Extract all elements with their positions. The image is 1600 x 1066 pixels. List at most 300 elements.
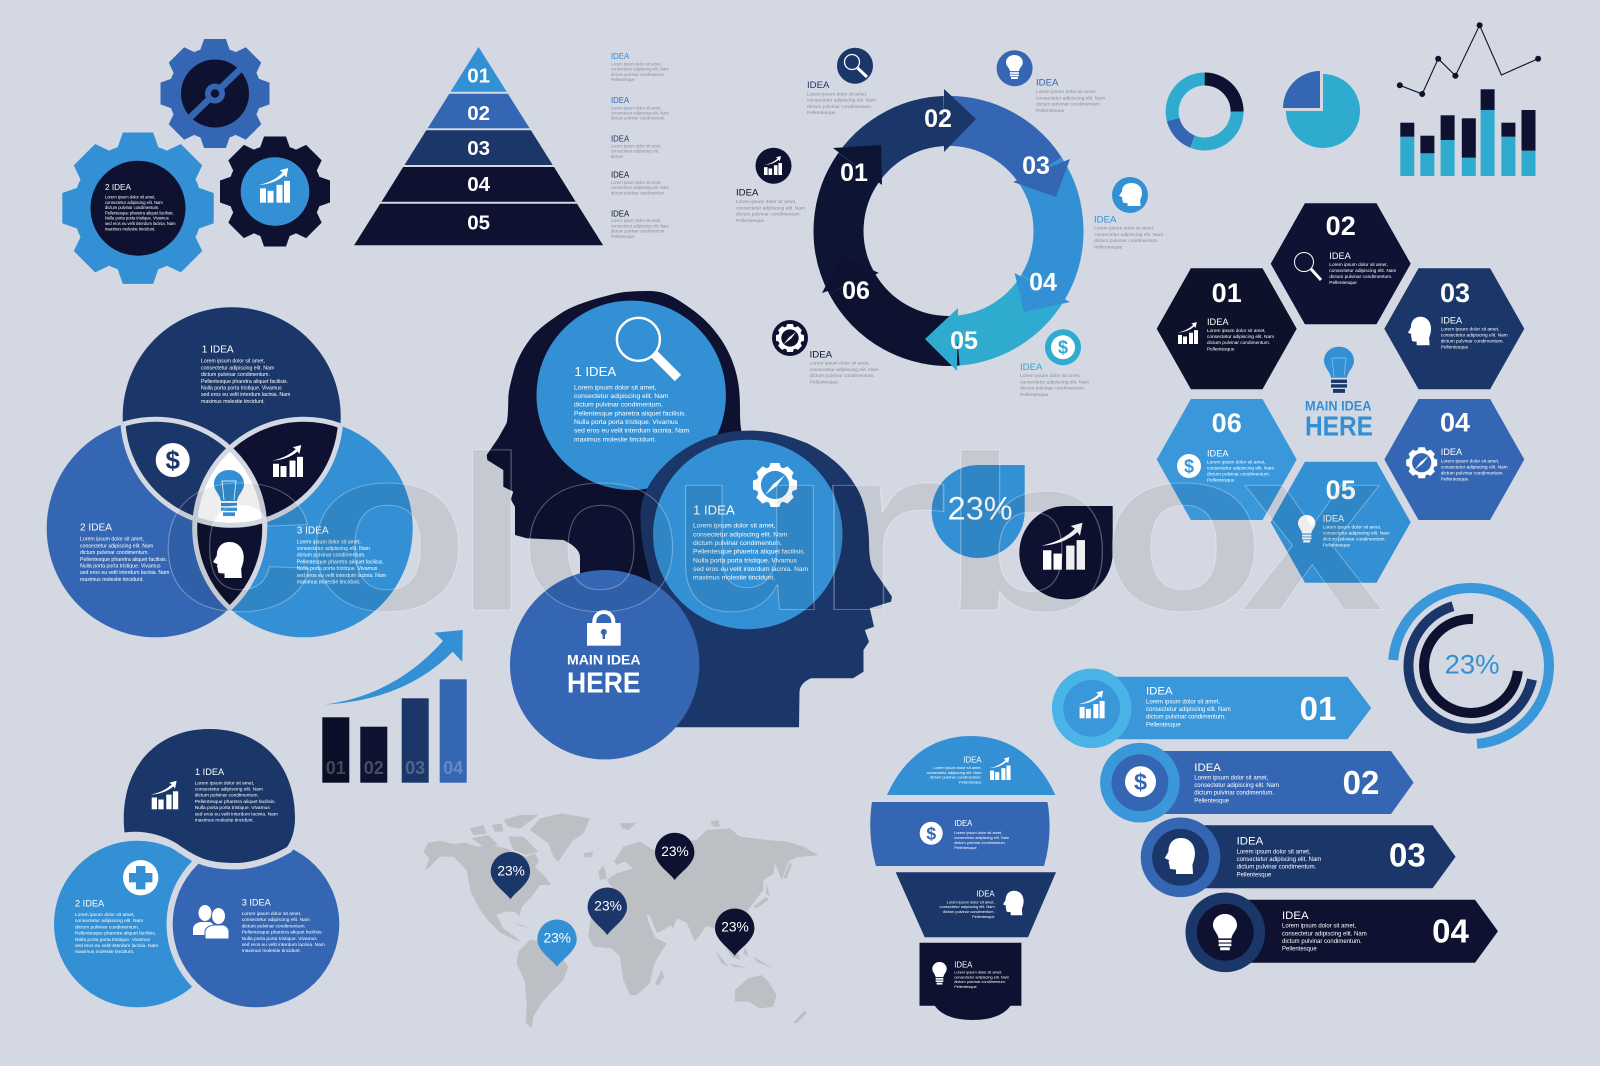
trefoil text 3: consectetur adipiscing elit. Nam	[242, 917, 310, 923]
map pin: africa	[588, 888, 627, 935]
gear: left with text	[62, 132, 214, 284]
circle: idea 1 upper: 1 IDEA	[574, 364, 616, 379]
ring label: dollar: dictum pulvinar condimentum.	[1020, 386, 1085, 392]
hexagon 01: Lorem ipsum dolor sit amet,	[1207, 328, 1266, 334]
circle: idea 1 lower: Nulla porta porta tristique. Vivamus	[693, 557, 798, 564]
trefoil text 2: Nulla porta porta tristique. Vivamus	[75, 937, 151, 943]
banner 02: dictum pulvinar condimentum.	[1194, 791, 1274, 797]
main idea heading	[1305, 398, 1373, 442]
venn text 2	[80, 523, 169, 583]
banner 02: 02	[1343, 764, 1379, 801]
bulb segment 2: dictum pulvinar condimentum.	[954, 840, 1006, 845]
trefoil text 2: sed eros eu velit interdum lacinia. Nam	[75, 943, 158, 949]
hexagon 06: 06	[1212, 408, 1242, 438]
ring label: bulb	[1036, 78, 1105, 114]
banner 04: dictum pulvinar condimentum.	[1282, 939, 1362, 945]
venn circles	[47, 307, 413, 637]
ring label: chart	[736, 188, 805, 224]
gauge: 23% concentric rings: 23%	[1445, 649, 1500, 679]
trefoil text 1: maximus molestie tincidunt.	[195, 818, 254, 824]
bulb segment 1: IDEA	[963, 755, 982, 764]
venn text 2: Lorem ipsum dolor sit amet,	[80, 537, 144, 543]
hexagon 02: 02	[1326, 211, 1356, 241]
map pin: russia	[655, 833, 694, 880]
trefoil text 1	[195, 767, 278, 824]
venn text 1: maximus molestie tincidunt.	[201, 399, 265, 405]
panel: gears	[62, 39, 330, 284]
pyramid level 02	[428, 94, 530, 128]
venn text 1: dictum pulvinar condimentum.	[201, 372, 270, 378]
circle: main idea: HERE	[567, 667, 641, 699]
map pin: north america: 23%	[497, 863, 525, 879]
banner 04: consectetur adipiscing elit. Nam	[1282, 931, 1367, 937]
banner 03: dictum pulvinar condimentum.	[1237, 865, 1317, 871]
trefoil text 3: Nulla porta porta tristique. Vivamus	[242, 936, 317, 942]
icon: head	[213, 542, 244, 578]
circle: idea 1 lower: maximus molestie tincidunt.	[693, 575, 775, 582]
venn text 1: Nulla porta porta tristique. Vivamus	[201, 386, 282, 392]
hexagon 06: Lorem ipsum dolor sit amet,	[1207, 459, 1266, 465]
ring bodies	[839, 121, 1059, 341]
panel: trefoil three ideas	[54, 729, 346, 1014]
venn text 2: Pellentesque pharetra aliquet facilisis.	[80, 557, 167, 563]
map pin: africa: 23%	[594, 898, 622, 914]
venn text 3: 3 IDEA	[297, 525, 329, 536]
trefoil text 2: Lorem ipsum dolor sit amet,	[75, 912, 135, 918]
watermark: u	[669, 396, 832, 660]
bulb segment 2: $	[926, 824, 936, 844]
watermark: o	[306, 396, 469, 660]
icon: chart	[272, 445, 303, 477]
pyramid level 01: 01	[467, 65, 490, 88]
bar labels: 02	[364, 758, 384, 778]
icon: dollar: $	[165, 445, 180, 475]
gear: right with chart icon	[220, 136, 330, 246]
trefoil text 3: sed eros eu velit interdum lacinia. Nam	[242, 942, 325, 948]
ring label: dollar: Lorem ipsum dolor sit amet,	[1020, 373, 1080, 379]
bulb segment 4	[920, 943, 1021, 1020]
pyramid level 03: 03	[467, 137, 490, 160]
hexagon 03: Lorem ipsum dolor sit amet,	[1441, 326, 1499, 332]
ring numbers: 05	[950, 327, 978, 355]
hexagon 04: Pellentesque	[1441, 476, 1469, 482]
arrow: rising	[325, 630, 463, 704]
hexagon 03	[1384, 268, 1524, 389]
watermark: x	[1241, 396, 1384, 660]
pyramid labels: Pellentesque	[611, 77, 635, 82]
gear: left with text: Lorem ipsum dolor sit amet,	[105, 194, 156, 200]
ring label: compass gear	[810, 349, 879, 385]
banner 02: IDEA	[1194, 762, 1221, 774]
hexagon 01: dictum pulvinar condimentum.	[1207, 340, 1270, 346]
pyramid labels: Lorem ipsum dolor sit amet,	[611, 105, 662, 110]
hexagon 04: Lorem ipsum dolor sit amet,	[1441, 458, 1499, 464]
banner 04: 04	[1432, 912, 1469, 949]
banner 01: consectetur adipiscing elit. Nam	[1146, 707, 1231, 713]
gear: left with text: dictum pulvinar condimentum.	[105, 205, 159, 210]
hexagon 01: 01	[1212, 278, 1242, 308]
bulb segment 3	[896, 872, 1056, 937]
banner 01: Lorem ipsum dolor sit amet,	[1146, 699, 1220, 705]
trefoil text 3: 3 IDEA	[242, 898, 272, 908]
trefoil text 2: Pellentesque pharetra aliquet facilisis.	[75, 931, 156, 937]
head silhouette: navy	[640, 431, 892, 727]
panel: light bulb segments	[870, 736, 1056, 1020]
pyramid labels: Lorem ipsum dolor sit amet,	[611, 62, 662, 66]
banner 02: $	[1134, 769, 1147, 795]
circle: idea 1 lower: sed eros eu velit interdum lacinia. Nam	[693, 566, 809, 573]
banner 04: Lorem ipsum dolor sit amet,	[1282, 924, 1356, 930]
trefoil text 1: 1 IDEA	[195, 767, 225, 777]
ring label: head: Lorem ipsum dolor sit amet,	[1094, 226, 1154, 232]
ring label: chart: Pellentesque	[736, 218, 765, 224]
bar labels: 01	[326, 758, 346, 778]
icon: dollar badge	[1045, 329, 1081, 365]
hexagon 03: IDEA	[1441, 315, 1463, 325]
bulb segment 2: IDEA	[954, 819, 973, 828]
watermark: b	[941, 410, 1114, 657]
venn text 2: maximus molestie tincidunt.	[80, 577, 144, 583]
gear: left with text: maximus molestie tincidunt.	[105, 226, 155, 231]
hexagon 06: $	[1184, 456, 1194, 476]
banner 01: 01	[1300, 690, 1336, 727]
trefoil text 3: Pellentesque pharetra aliquet facilisis.	[242, 930, 323, 936]
hexagon 01	[1157, 268, 1297, 389]
hexagon 02: IDEA	[1329, 251, 1352, 261]
trefoil text 2: consectetur adipiscing elit. Nam	[75, 918, 143, 924]
bar labels	[326, 758, 463, 778]
venn text 1	[201, 345, 290, 405]
trefoil text 2: dictum pulvinar condimentum.	[75, 924, 139, 930]
circle: idea 1 upper: Lorem ipsum dolor sit amet,	[574, 384, 657, 391]
banner 01: IDEA	[1146, 685, 1173, 697]
pie chart	[1283, 71, 1360, 148]
bulb segment 1: dictum pulvinar condimentum.	[930, 775, 982, 780]
ring label: dollar: Pellentesque	[1020, 392, 1049, 398]
ring label: magnifier: Pellentesque	[807, 110, 836, 116]
pyramid level 04	[382, 167, 576, 202]
petal 3	[173, 841, 339, 1007]
venn text 2: Nulla porta porta tristique. Vivamus	[80, 564, 161, 570]
venn intersections	[120, 416, 343, 610]
circle: idea 1 lower	[653, 440, 842, 629]
gear: left with text: Nulla porta porta tristique. Vivamus	[105, 216, 169, 221]
gear: left with text: 2 IDEA	[105, 183, 131, 192]
ring label: chart: consectetur adipiscing elit. Nam	[736, 205, 805, 211]
gear: top compass	[160, 39, 270, 148]
banner 03: IDEA	[1237, 836, 1264, 848]
hexagon 06: IDEA	[1207, 449, 1229, 459]
bulb segment 2: consectetur adipiscing elit. Nam	[954, 835, 1009, 840]
circle: idea 1 upper: Pellentesque pharetra aliquet facilisis.	[574, 410, 686, 417]
venn text 3: Lorem ipsum dolor sit amet,	[297, 539, 361, 545]
head silhouette: dark	[487, 291, 745, 600]
hexagon 02	[1271, 203, 1411, 324]
bulb segment 4: IDEA	[954, 960, 973, 969]
banner 04: IDEA	[1282, 910, 1309, 922]
hexagon 04	[1384, 399, 1524, 520]
bar chart with rising arrow	[322, 630, 467, 783]
banner 01: Pellentesque	[1146, 722, 1181, 728]
ring label: magnifier: Lorem ipsum dolor sit amet,	[807, 92, 867, 98]
ring label: compass gear: Pellentesque	[810, 379, 838, 385]
ring label: bulb: consectetur adipiscing elit. Nam	[1036, 95, 1105, 101]
hexagon 02: dictum pulvinar condimentum.	[1329, 274, 1392, 280]
ring label: compass gear: dictum pulvinar condimentum.	[810, 373, 875, 379]
circle: idea 1 lower: 1 IDEA	[693, 502, 735, 517]
map pin: russia: 23%	[661, 843, 689, 859]
venn text 1: Lorem ipsum dolor sit amet,	[201, 359, 265, 365]
ring label: compass gear: consectetur adipiscing elit. Nam	[810, 367, 879, 373]
bulb segment 3: dictum pulvinar condimentum.	[943, 909, 995, 914]
trefoil text 3	[242, 898, 325, 954]
icon: chart badge	[756, 148, 792, 184]
hexagon 05: Pellentesque	[1323, 542, 1351, 548]
pyramid labels: dictum pulvinar condimentum.	[611, 72, 665, 77]
bulb segment 4: consectetur adipiscing elit. Nam	[954, 974, 1009, 979]
banner 04: Pellentesque	[1282, 947, 1317, 953]
circle: idea 1 lower: consectetur adipiscing elit. Nam	[693, 531, 788, 538]
pyramid level 02: 02	[467, 102, 490, 125]
ring label: chart: Lorem ipsum dolor sit amet,	[736, 199, 796, 205]
circle: main idea	[510, 570, 699, 759]
banner 01: dictum pulvinar condimentum.	[1146, 715, 1226, 721]
gauge: 23% concentric rings	[1393, 588, 1549, 744]
venn text 3: Pellentesque pharetra aliquet facilisis.	[297, 559, 384, 565]
hexagon 05	[1271, 462, 1411, 583]
circle: idea 1 upper: consectetur adipiscing elit. Nam	[574, 393, 669, 400]
venn text 3: sed eros eu velit interdum lacinia. Nam	[297, 573, 386, 579]
trefoil text 1: Lorem ipsum dolor sit amet,	[195, 780, 254, 786]
hexagon 04: dictum pulvinar condimentum.	[1441, 470, 1504, 476]
hexagon 01: consectetur adipiscing elit. Nam	[1207, 334, 1274, 340]
venn text 2: consectetur adipiscing elit. Nam	[80, 543, 153, 549]
hexagon 04: 04	[1440, 408, 1470, 438]
banner 03: Lorem ipsum dolor sit amet,	[1237, 849, 1311, 855]
trefoil text 1: Pellentesque pharetra aliquet facilisis.	[195, 799, 276, 805]
bulb segment 4: Pellentesque	[954, 984, 977, 989]
gear: left with text: consectetur adipiscing elit. Nam	[105, 200, 163, 205]
banner 03	[1141, 818, 1456, 897]
icon: compass gear badge	[772, 320, 808, 356]
trefoil text 2: maximus molestie tincidunt.	[75, 949, 134, 955]
bar labels: 03	[405, 758, 425, 778]
banner 03: Pellentesque	[1237, 872, 1272, 878]
circle: idea 1 lower: Lorem ipsum dolor sit amet,	[693, 523, 776, 530]
pyramid labels: Lorem ipsum dolor sit amet,	[611, 144, 662, 149]
venn text 1: consectetur adipiscing elit. Nam	[201, 365, 274, 371]
icon: magnifier badge	[837, 48, 873, 84]
bulb segment 1	[887, 736, 1055, 795]
panel: overlapping heads	[487, 291, 892, 759]
bulb segment 1: consectetur adipiscing elit. Nam	[927, 770, 982, 775]
bulb segment 1: Lorem ipsum dolor sit amet,	[933, 765, 982, 770]
circle: idea 1 lower: Pellentesque pharetra aliquet facilisis.	[693, 549, 805, 556]
bulb segment 4: Lorem ipsum dolor sit amet,	[954, 970, 1002, 974]
pyramid level 05	[354, 204, 603, 245]
trefoil text 1: sed eros eu velit interdum lacinia. Nam	[195, 811, 278, 817]
ring label: compass gear: IDEA	[810, 349, 833, 360]
ring arrow heads	[822, 89, 1070, 371]
hexagon 03: Pellentesque	[1441, 344, 1469, 350]
bulb segment 3: IDEA	[976, 890, 995, 899]
bars	[322, 679, 467, 783]
pyramid labels: IDEA	[611, 96, 630, 105]
line chart	[1397, 22, 1541, 97]
banner 02: Lorem ipsum dolor sit amet,	[1194, 775, 1269, 781]
petal 2	[54, 834, 346, 1014]
map pin: asia	[715, 908, 754, 956]
ring label: chart: dictum pulvinar condimentum.	[736, 212, 801, 218]
bar labels: 04	[443, 758, 463, 778]
icon: bulb	[214, 470, 244, 516]
hexagon 02: Lorem ipsum dolor sit amet,	[1329, 262, 1388, 268]
circle: idea 1 upper: Nulla porta porta tristique. Vivamus	[574, 419, 679, 426]
watermark: o	[519, 396, 683, 660]
pyramid level 01	[450, 47, 507, 92]
ring label: dollar: consectetur adipiscing elit. Nam	[1020, 379, 1089, 385]
pyramid labels: consectetur adipiscing elit. Nam	[611, 185, 669, 190]
map continents	[423, 813, 818, 1028]
hexagon 04: consectetur adipiscing elit. Nam	[1441, 464, 1508, 470]
icon: dollar badge: $	[1058, 338, 1068, 358]
ring numbers: 03	[1022, 152, 1050, 180]
ring label: compass gear: Lorem ipsum dolor sit amet,	[810, 360, 870, 366]
ring numbers	[840, 105, 1057, 355]
map pin: asia: 23%	[721, 919, 749, 935]
pyramid labels: Lorem ipsum dolor sit amet,	[611, 218, 662, 223]
panel: pyramid	[354, 47, 669, 245]
pyramid level 03	[404, 130, 553, 165]
trefoil text 3: maximus molestie tincidunt.	[242, 948, 301, 954]
venn text 3	[297, 525, 386, 586]
gear: left with text: sed eros eu velit interdum lacinia. Nam	[105, 221, 176, 226]
ring label: magnifier: consectetur adipiscing elit. Nam	[807, 98, 876, 104]
venn text 3: Nulla porta porta tristique. Vivamus	[297, 566, 378, 572]
callout: 23% blue drop	[932, 465, 1025, 558]
icon: head badge	[1112, 177, 1148, 213]
donut chart	[1172, 79, 1237, 144]
venn text 3: dictum pulvinar condimentum.	[297, 553, 366, 559]
venn text 3: maximus molestie tincidunt.	[297, 580, 360, 586]
bulb segment 1: Pellentesque	[959, 780, 982, 784]
watermark	[157, 396, 1384, 660]
ring numbers: 04	[1029, 269, 1057, 297]
icon: dollar	[156, 443, 190, 477]
ring label: bulb: dictum pulvinar condimentum.	[1036, 102, 1101, 108]
callout: chart dark drop	[1019, 506, 1113, 599]
icon: centre bulb	[1324, 347, 1354, 393]
ring numbers: 06	[842, 277, 870, 305]
ring numbers: 02	[924, 105, 952, 133]
callout: 23% blue drop: 23%	[948, 490, 1013, 526]
ring label: head: IDEA	[1094, 215, 1117, 226]
pyramid level 05: 05	[467, 212, 490, 235]
hexagon 02: Pellentesque	[1329, 280, 1357, 286]
ring label: magnifier: IDEA	[807, 80, 830, 91]
pyramid labels: dictum pulvinar condimentum.	[611, 116, 665, 121]
ring label: dollar	[1020, 362, 1089, 398]
venn text 2: dictum pulvinar condimentum.	[80, 550, 149, 556]
ring label: chart: IDEA	[736, 188, 759, 199]
venn text 3: consectetur adipiscing elit. Nam	[297, 546, 370, 552]
hexagon 05: IDEA	[1323, 514, 1345, 524]
banner 01	[1052, 668, 1371, 748]
ring label: head: Pellentesque	[1094, 244, 1123, 250]
pyramid labels	[611, 52, 669, 239]
pyramid labels: IDEA	[611, 171, 630, 180]
main idea heading: MAIN IDEA	[1305, 398, 1372, 414]
hexagon 05: consectetur adipiscing elit. Nam	[1323, 530, 1390, 536]
ring label: head: dictum pulvinar condimentum.	[1094, 238, 1159, 244]
bulb segment 4: dictum pulvinar condimentum.	[954, 979, 1006, 984]
panel: arrow banners	[1052, 668, 1498, 972]
pyramid labels: Lorem ipsum dolor sit amet,	[611, 180, 662, 185]
venn text 1: Pellentesque pharetra aliquet facilisis.	[201, 379, 288, 385]
icon: people	[193, 905, 229, 939]
ring label: dollar: IDEA	[1020, 362, 1043, 373]
pyramid labels: Pellentesque	[611, 234, 635, 239]
panel: world map	[423, 813, 818, 1028]
hexagon 02: consectetur adipiscing elit. Nam	[1329, 268, 1396, 274]
panel: circular process ring	[736, 48, 1163, 398]
petal 1	[124, 729, 295, 863]
trefoil text 2: 2 IDEA	[75, 899, 105, 909]
map pin: south america: 23%	[544, 929, 571, 945]
banner 02: Pellentesque	[1194, 798, 1230, 804]
hexagon 06: dictum pulvinar condimentum.	[1207, 471, 1270, 477]
banner 04	[1186, 892, 1498, 972]
bulb segment 3: Lorem ipsum dolor sit amet,	[947, 899, 995, 904]
trefoil text 1: dictum pulvinar condimentum.	[195, 793, 259, 799]
gear: left with text: Pellentesque pharetra aliquet facilisis.	[105, 210, 174, 215]
hexagon 03: dictum pulvinar condimentum.	[1441, 338, 1504, 344]
watermark: l	[453, 410, 531, 657]
banner 03: 03	[1389, 837, 1426, 874]
bulb segment 3: consectetur adipiscing elit. Nam	[940, 904, 995, 909]
circle: idea 1 upper: sed eros eu velit interdum lacinia. Nam	[574, 428, 690, 435]
bulb segment 3: Pellentesque	[972, 914, 995, 919]
banner 02	[1100, 743, 1414, 822]
icon: plus	[123, 860, 158, 895]
circle: idea 1 upper: dictum pulvinar condimentum.	[574, 402, 663, 409]
pyramid labels: consectetur adipiscing elit.	[611, 149, 659, 154]
circle: idea 1 upper	[536, 301, 726, 490]
banner 03: consectetur adipiscing elit. Nam	[1237, 857, 1321, 863]
trefoil text 3: dictum pulvinar condimentum.	[242, 923, 306, 929]
watermark: o	[1102, 396, 1265, 660]
pyramid labels: IDEA	[611, 52, 630, 61]
ring label: magnifier	[807, 80, 876, 116]
panel: venn diagram	[47, 307, 413, 637]
hexagon 01: IDEA	[1207, 317, 1229, 327]
panel: hexagons	[1157, 203, 1524, 583]
pyramid labels: IDEA	[611, 135, 630, 144]
pyramid labels: IDEA	[611, 210, 630, 219]
hexagon 06: consectetur adipiscing elit. Nam	[1207, 465, 1274, 471]
bulb segment 2: Pellentesque	[954, 845, 977, 850]
ring numbers: 01	[840, 159, 868, 187]
hexagon 06: Pellentesque	[1207, 477, 1235, 483]
stacked bar chart	[1400, 89, 1536, 176]
venn text 1: 1 IDEA	[202, 345, 234, 356]
hexagon 03: 03	[1440, 278, 1470, 308]
hexagon 05: 05	[1326, 475, 1356, 505]
icon: chart	[151, 781, 178, 809]
hexagon 01: Pellentesque	[1207, 346, 1235, 352]
trefoil text 1: Nulla porta porta tristique. Vivamus	[195, 805, 270, 811]
circle: idea 1 lower: dictum pulvinar condimentum.	[693, 540, 782, 547]
